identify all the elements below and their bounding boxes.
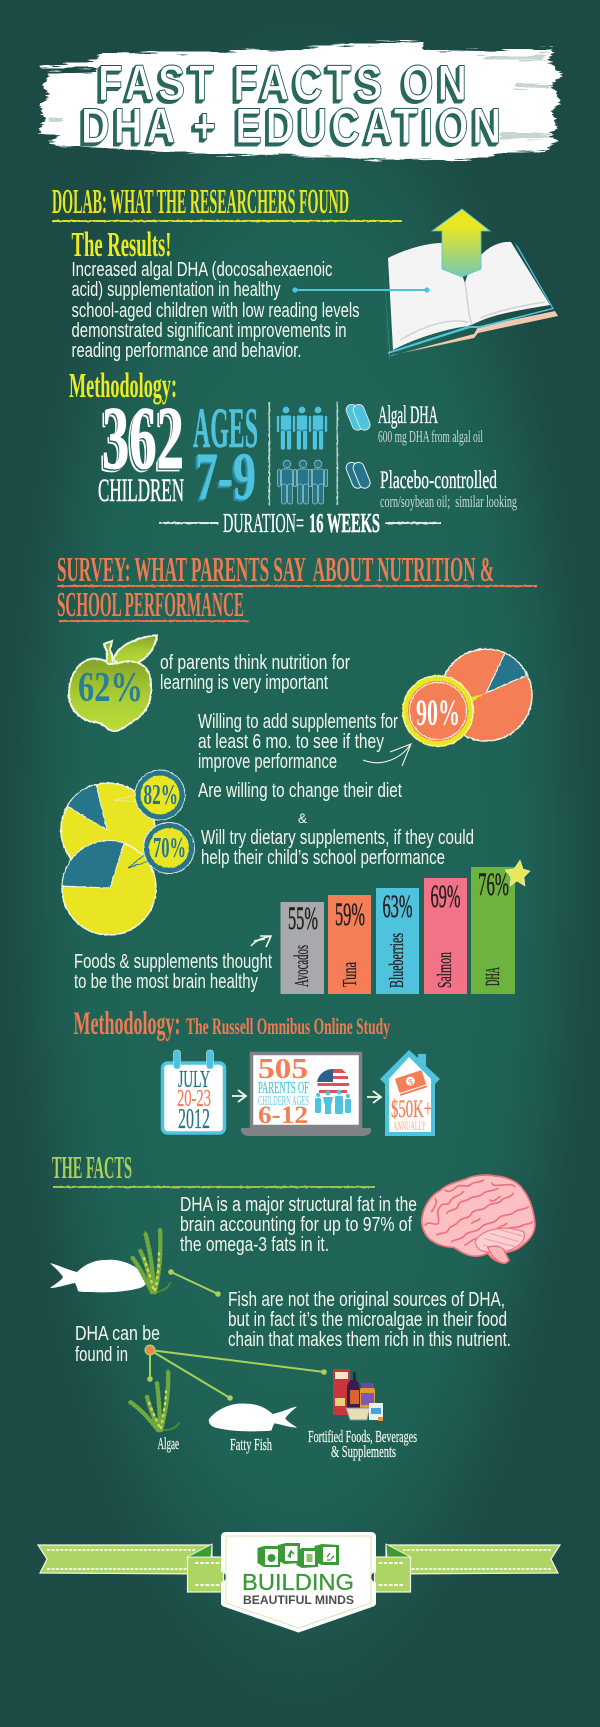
bar: tuna bbox=[328, 895, 371, 994]
bar: blueberries: 63% bbox=[382, 889, 412, 925]
ribbon left bbox=[38, 1544, 224, 1592]
icon: placebo capsules bbox=[344, 461, 372, 490]
icon: calendar: 2012 bbox=[178, 1104, 210, 1135]
icon: flag globe bbox=[317, 1069, 349, 1098]
the results text block: demonstrated significant improvements in bbox=[72, 320, 346, 342]
text: change diet and try supplements: help their child’s school performance bbox=[201, 847, 445, 869]
connector line: results to book bbox=[292, 287, 430, 293]
text: DHA can be found in: found in bbox=[75, 1344, 128, 1366]
icon: laptop with survey panel: 505 bbox=[258, 1053, 308, 1085]
badge shield bbox=[221, 1532, 376, 1632]
placebo label bbox=[380, 467, 517, 511]
text: willing to add supplements: at least 6 mo. to see if they bbox=[198, 731, 384, 753]
white brush stroke bbox=[38, 41, 563, 160]
heading: methodology study bbox=[74, 1006, 390, 1042]
icon: letter blocks bbox=[258, 1543, 339, 1568]
dividers bbox=[268, 402, 338, 505]
duration: 16 WEEKS bbox=[309, 508, 380, 538]
icon: algal DHA capsules bbox=[344, 403, 372, 432]
text: change diet and try supplements: Will try dietary supplements, if they could bbox=[201, 827, 474, 849]
arrow: to 90% pie bbox=[363, 744, 411, 766]
text: foods and supplements bbox=[74, 951, 272, 993]
stat: ages 7-9 bbox=[193, 397, 258, 514]
heading: the facts: THE FACTS bbox=[52, 1149, 132, 1185]
pie charts: 82% and 70%: 70% bbox=[153, 833, 186, 864]
the results text block: The Results! bbox=[72, 225, 172, 264]
text: fish and microalgae bbox=[228, 1289, 511, 1351]
icon: laptop with survey panel: CHILDERN AGES bbox=[258, 1094, 309, 1109]
icon: algae bbox=[130, 1370, 179, 1430]
label: fortified foods: Fortified Foods, Beverages bbox=[308, 1427, 417, 1446]
icon: open book with arrow bbox=[384, 209, 558, 362]
label: fortified foods bbox=[308, 1427, 417, 1461]
icon: apple 62%: 62% bbox=[78, 665, 143, 711]
text: DHA structural fat: brain accounting for up to 97% of bbox=[180, 1214, 412, 1236]
icon: fish with algae bbox=[50, 1228, 170, 1292]
text: willing to add supplements bbox=[198, 711, 398, 773]
icon: brain bbox=[422, 1175, 535, 1263]
icon: calendar: 20-23 bbox=[177, 1086, 211, 1112]
text: DHA structural fat: DHA is a major structural fat in the bbox=[180, 1194, 417, 1216]
algal DHA label bbox=[378, 402, 483, 446]
heading: methodology: Methodology: bbox=[69, 366, 177, 405]
title text: FAST FACTS ON bbox=[98, 55, 471, 111]
icon: calendar: JULY bbox=[178, 1067, 210, 1093]
text: DHA can be found in bbox=[75, 1323, 160, 1366]
heading: methodology study: Methodology: bbox=[74, 1006, 180, 1042]
label: fortified foods: & Supplements bbox=[331, 1442, 396, 1461]
pie chart: 90%: 90% bbox=[416, 693, 460, 734]
title text bbox=[81, 55, 505, 154]
text: DHA structural fat: the omega-3 fats in it. bbox=[180, 1234, 329, 1256]
heading: methodology study: The Russell Omnibus Online Study bbox=[186, 1014, 390, 1039]
bar: salmon: Salmon bbox=[434, 952, 456, 988]
connector: algae to text bbox=[168, 1269, 221, 1297]
duration: DURATION= bbox=[223, 508, 304, 538]
text: willing to add supplements: improve performance bbox=[198, 751, 337, 773]
bar: DHA: 76% bbox=[478, 867, 509, 903]
connector tree: DHA sources bbox=[145, 1345, 327, 1401]
bar: salmon bbox=[424, 878, 467, 994]
bar: tuna: Tuna bbox=[339, 962, 361, 987]
duration bbox=[159, 508, 441, 538]
icon: apple 62% bbox=[69, 635, 157, 731]
text: change diet and try supplements: Are willing to change their diet bbox=[198, 780, 402, 802]
text: change diet and try supplements: & bbox=[298, 810, 308, 826]
icon: dark people bbox=[277, 460, 328, 504]
placebo label: Placebo-controlled bbox=[380, 467, 497, 494]
bar: blueberries bbox=[376, 888, 419, 994]
bar: DHA bbox=[471, 867, 515, 994]
text: foods and supplements: to be the most brain healthy bbox=[74, 971, 258, 993]
pie charts: 82% and 70%: 82% bbox=[144, 779, 178, 811]
text: nutrition important: learning is very important bbox=[160, 672, 328, 694]
logo: building beautiful minds ribbon badge bbox=[38, 1532, 560, 1632]
label: algae: Algae bbox=[158, 1434, 179, 1453]
icon: algae beside fish bbox=[132, 1228, 170, 1292]
the results text block: Increased algal DHA (docosahexaenoic bbox=[72, 259, 332, 281]
text: willing to add supplements: Willing to add supplements for bbox=[198, 711, 398, 733]
text: change diet and try supplements bbox=[198, 780, 474, 869]
text: fish and microalgae: but in fact it’s the microalgae in their food bbox=[228, 1309, 507, 1331]
icon: family bbox=[315, 1090, 351, 1114]
logo: building beautiful minds ribbon badge: BEAUTIFUL MINDS bbox=[243, 1595, 354, 1607]
title banner bbox=[38, 41, 563, 160]
icon: money: $ bbox=[407, 1077, 415, 1087]
bar: salmon: 69% bbox=[430, 879, 460, 915]
icon: laptop with survey panel: PARENTS OF bbox=[258, 1078, 309, 1097]
text: fish and microalgae: Fish are not the original sources of DHA, bbox=[228, 1289, 505, 1311]
text: fish and microalgae: chain that makes them rich in this nutrient. bbox=[228, 1329, 511, 1351]
the results text block: acid) supplementation in healthy bbox=[72, 279, 280, 301]
the results text block: reading performance and behavior. bbox=[72, 340, 302, 362]
icon: star bbox=[505, 860, 530, 886]
stat: 362 children: CHILDREN bbox=[98, 473, 184, 509]
ribbon right bbox=[374, 1544, 560, 1592]
heading: survey: SCHOOL PERFORMANCE bbox=[57, 585, 244, 624]
icon: house income: $50K+ bbox=[391, 1096, 432, 1123]
icon: laptop with survey panel: 6-12 bbox=[258, 1102, 308, 1129]
algal DHA label: 600 mg DHA from algal oil bbox=[378, 427, 483, 446]
arrow: laptop to house bbox=[367, 1091, 381, 1103]
icon: calendar bbox=[162, 1050, 224, 1135]
logo wordmark: BUILDING bbox=[242, 1569, 354, 1595]
icon: up arrow bbox=[432, 209, 490, 277]
icon: laptop with survey panel bbox=[241, 1053, 371, 1136]
arrow: calendar to laptop bbox=[232, 1090, 246, 1102]
bar chart: brain healthy foods bbox=[280, 867, 515, 994]
stat: 362 children bbox=[98, 389, 184, 509]
text: DHA structural fat bbox=[180, 1194, 417, 1256]
pie chart: 90% bbox=[403, 649, 532, 746]
label: fatty fish: Fatty Fish bbox=[230, 1435, 272, 1454]
bar: blueberries: Blueberries bbox=[386, 933, 408, 988]
bar: tuna: 59% bbox=[335, 897, 365, 933]
bar: avocados bbox=[280, 901, 324, 994]
text: nutrition important: of parents think nutrition for bbox=[160, 652, 350, 674]
pie charts: 82% and 70% bbox=[61, 770, 194, 935]
the results text block: school-aged children with low reading levels bbox=[72, 300, 360, 322]
text: foods and supplements: Foods & supplements thought bbox=[74, 951, 272, 973]
stat: 362 children: 362 bbox=[102, 389, 184, 488]
icon: fatty fish bbox=[209, 1404, 297, 1431]
icon: blue people bbox=[276, 406, 328, 450]
the results text block bbox=[72, 225, 360, 362]
text: nutrition important bbox=[160, 652, 350, 694]
icon: house income: ANNUALLY bbox=[393, 1118, 426, 1133]
bar: avocados: Avocados bbox=[291, 945, 313, 987]
stat: ages 7-9: 7-9 bbox=[195, 438, 256, 514]
icon: house income bbox=[380, 1050, 440, 1136]
algal DHA label: Algal DHA bbox=[378, 402, 438, 429]
arrow: to bars bbox=[251, 936, 271, 947]
bar: avocados: 55% bbox=[288, 901, 318, 937]
text: DHA can be found in: DHA can be bbox=[75, 1323, 160, 1345]
icon: fortified products bbox=[333, 1369, 383, 1421]
heading: survey bbox=[57, 550, 537, 624]
bar: DHA: DHA bbox=[482, 967, 504, 986]
text: AGES bbox=[193, 397, 258, 460]
title text: DHA + EDUCATION bbox=[81, 98, 505, 154]
